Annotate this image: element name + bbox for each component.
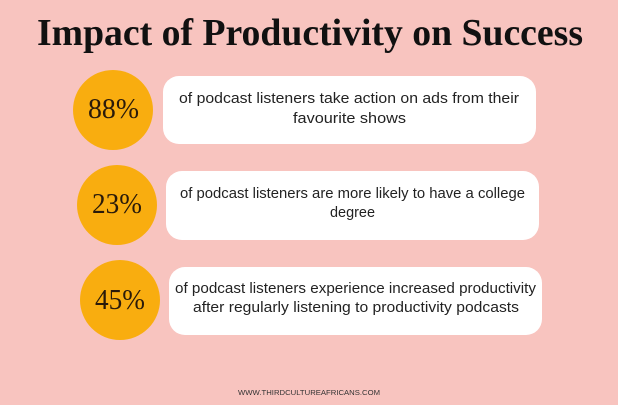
circle: 88% (73, 70, 153, 150)
circle: 23%: 23% (92, 188, 142, 220)
circle: 45%: 45% (95, 284, 145, 316)
circle: 23% (77, 165, 157, 245)
circle: 88%: 88% (88, 93, 139, 125)
card: 45% description (169, 267, 542, 335)
card: 88% description (163, 76, 536, 144)
card: 23% description: of podcast listeners are more likely to have a college (180, 185, 525, 202)
circle: 45% (80, 260, 160, 340)
row 3: 45% (80, 260, 542, 340)
card: 23% description: degree (330, 204, 375, 221)
row 1: 88% (73, 70, 536, 150)
footer url: WWW.THIRDCULTUREAFRICANS.COM (238, 390, 380, 397)
title: Impact of Productivity on Success (37, 12, 583, 54)
card: 45% description: after regularly listening to productivity podcasts (193, 299, 519, 316)
card: 45% description: of podcast listeners experience increased productivity (175, 280, 536, 297)
card: 23% description (166, 171, 539, 240)
row 2: 23% (77, 165, 539, 245)
card: 88% description: of podcast listeners take action on ads from their (179, 90, 519, 107)
card: 88% description: favourite shows (293, 110, 406, 127)
